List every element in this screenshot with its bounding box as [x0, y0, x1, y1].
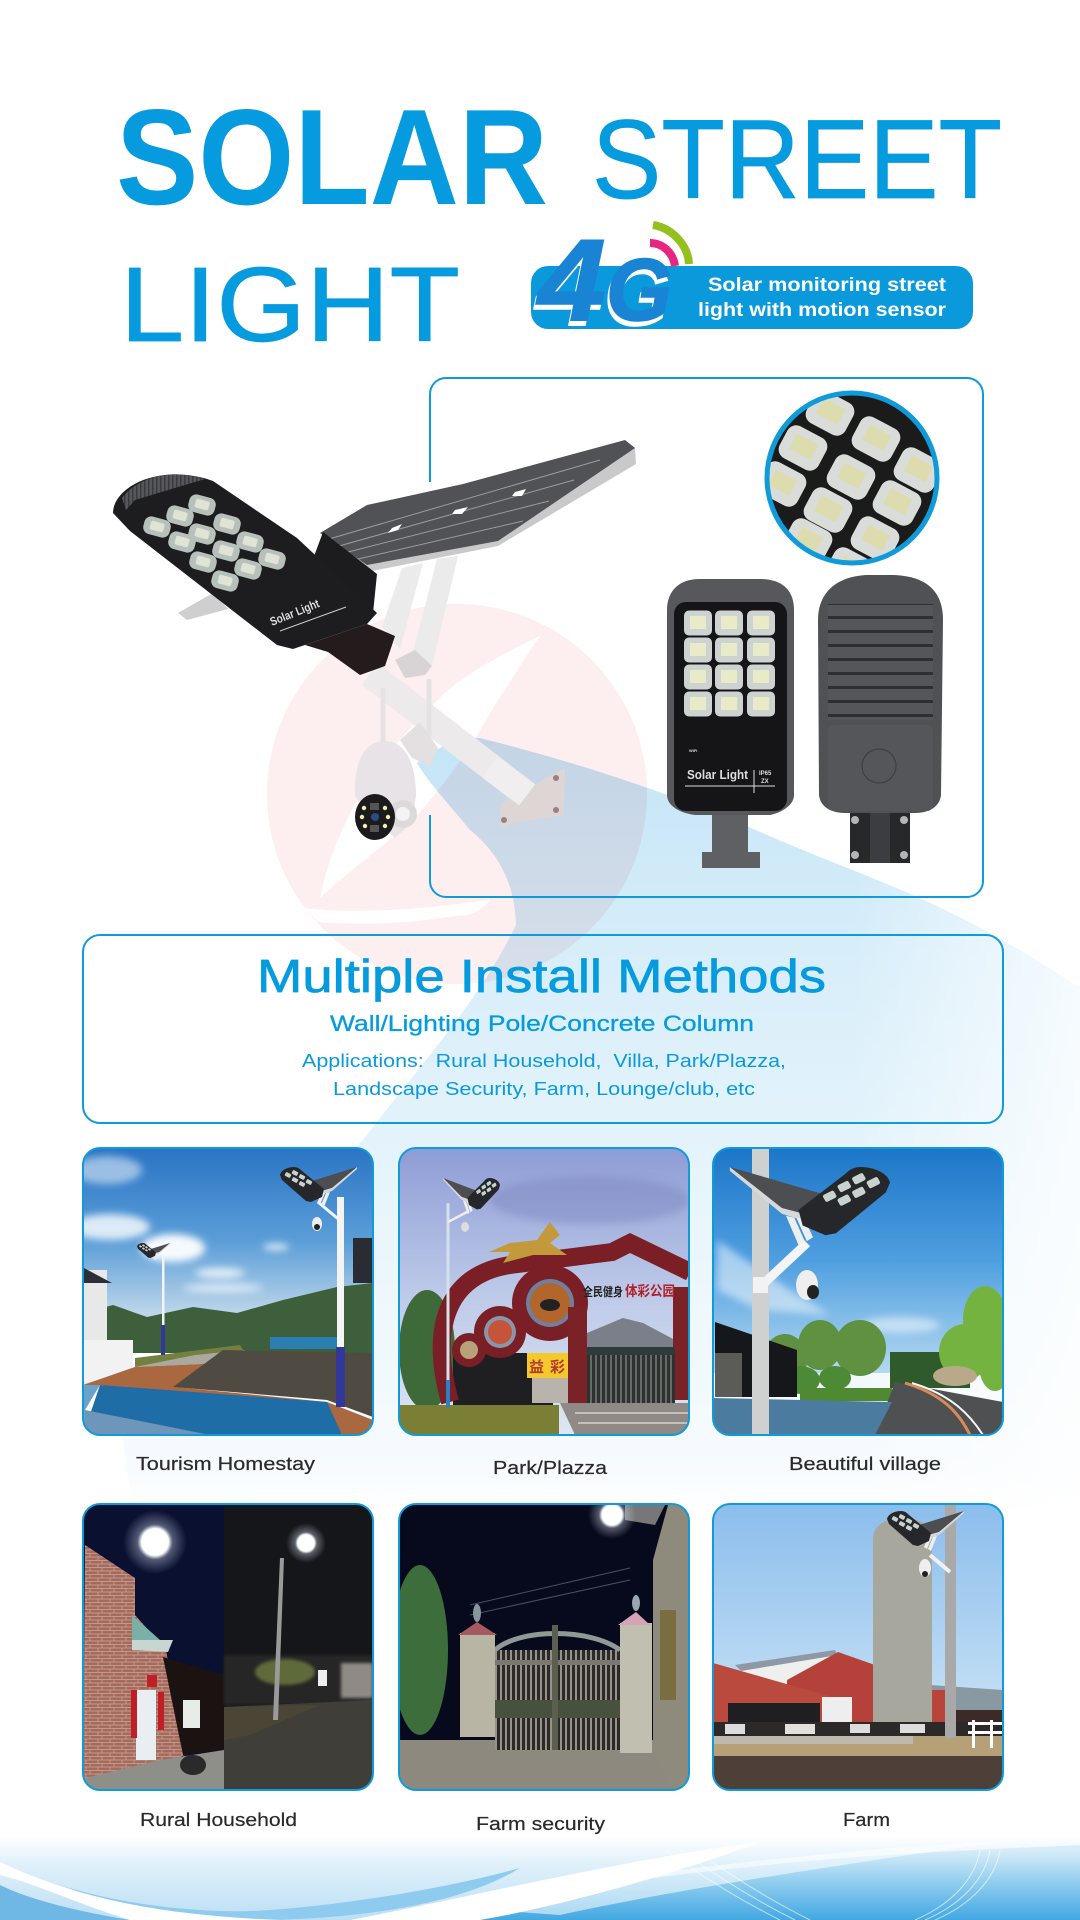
battery box — [313, 532, 377, 613]
main pole — [370, 674, 527, 795]
gate sign — [583, 1284, 674, 1298]
badge text: Solar monitoring street — [708, 275, 947, 296]
photo: tourism homestay — [70, 1148, 373, 1435]
front label: ZX — [761, 779, 769, 785]
title: SOLAR STREET LIGHT: LIGHT — [120, 246, 460, 364]
badge text — [698, 275, 947, 321]
product: lamp back view — [818, 575, 943, 863]
gate sign: 体彩公园 — [625, 1283, 675, 1299]
title: SOLAR STREET LIGHT — [116, 81, 1002, 364]
icon: signal arcs — [650, 225, 689, 266]
strut clamp — [395, 650, 432, 678]
black face — [674, 602, 787, 811]
black sleeve — [305, 624, 395, 675]
lamp label: Solar Light — [268, 596, 321, 629]
solar panel frame — [360, 448, 636, 572]
product: solar street light with camera — [113, 440, 636, 840]
product: lamp front view — [667, 579, 794, 868]
camera antennas — [383, 679, 429, 741]
background: pink circle logo with white bird — [267, 604, 647, 984]
applications — [302, 1050, 786, 1099]
install methods box — [83, 935, 1003, 1123]
front label: WiFi — [689, 748, 697, 753]
gate sign: 全民健身 — [583, 1284, 623, 1299]
captions row 2: Rural Household — [140, 1810, 297, 1830]
front label — [687, 748, 772, 785]
badge: 4G solar monitoring — [531, 215, 973, 345]
support struts — [382, 556, 458, 666]
wall bracket — [490, 767, 565, 829]
subheading: Wall/Lighting Pole/Concrete Column — [330, 1011, 754, 1036]
captions row 2: Farm security — [476, 1814, 605, 1834]
housing — [818, 575, 943, 813]
badge bar — [531, 266, 973, 329]
product panel border — [430, 378, 983, 897]
captions row 2 — [140, 1810, 890, 1834]
applications: Applications: Rural Household, Villa, Park/Plazza, — [302, 1050, 786, 1071]
cooling fins — [828, 604, 933, 720]
4G logo — [536, 215, 672, 345]
applications: Landscape Security, Farm, Lounge/club, etc — [333, 1078, 755, 1099]
front label: IP65 — [759, 771, 772, 777]
front label: Solar Light — [687, 768, 749, 782]
heading: Multiple Install Methods — [257, 950, 826, 1002]
solar panel — [320, 440, 635, 565]
bottom wave decoration — [0, 1836, 1080, 1920]
photo: park plazza — [399, 1148, 690, 1435]
background: light blue swoosh — [123, 738, 1080, 1510]
rear panel fin — [178, 593, 228, 620]
title: SOLAR STREET LIGHT: SOLAR — [116, 81, 548, 233]
housing — [667, 579, 794, 815]
photo: farm — [713, 1504, 1003, 1791]
lamp head — [113, 474, 377, 649]
photo: beautiful village — [713, 1148, 1011, 1435]
camera dome — [355, 741, 417, 840]
photo: rural household — [83, 1504, 373, 1790]
photo: farm security — [392, 1491, 689, 1790]
captions row 1: Park/Plazza — [493, 1458, 608, 1478]
detail circle: LED modules — [764, 390, 940, 566]
captions row 1: Beautiful village — [789, 1454, 941, 1474]
neck — [702, 805, 760, 868]
4G logo: G — [606, 240, 672, 339]
camera arm — [400, 722, 438, 766]
park sign text: 益彩 — [529, 1358, 565, 1376]
rear mount — [850, 808, 910, 863]
captions row 1 — [136, 1454, 941, 1478]
4G logo: 4 — [536, 215, 606, 345]
captions row 1: Tourism Homestay — [136, 1454, 315, 1474]
battery cover — [828, 725, 933, 811]
captions row 2: Farm — [843, 1810, 890, 1830]
badge text: light with motion sensor — [698, 300, 947, 321]
title: SOLAR STREET LIGHT: STREET — [592, 97, 1002, 222]
